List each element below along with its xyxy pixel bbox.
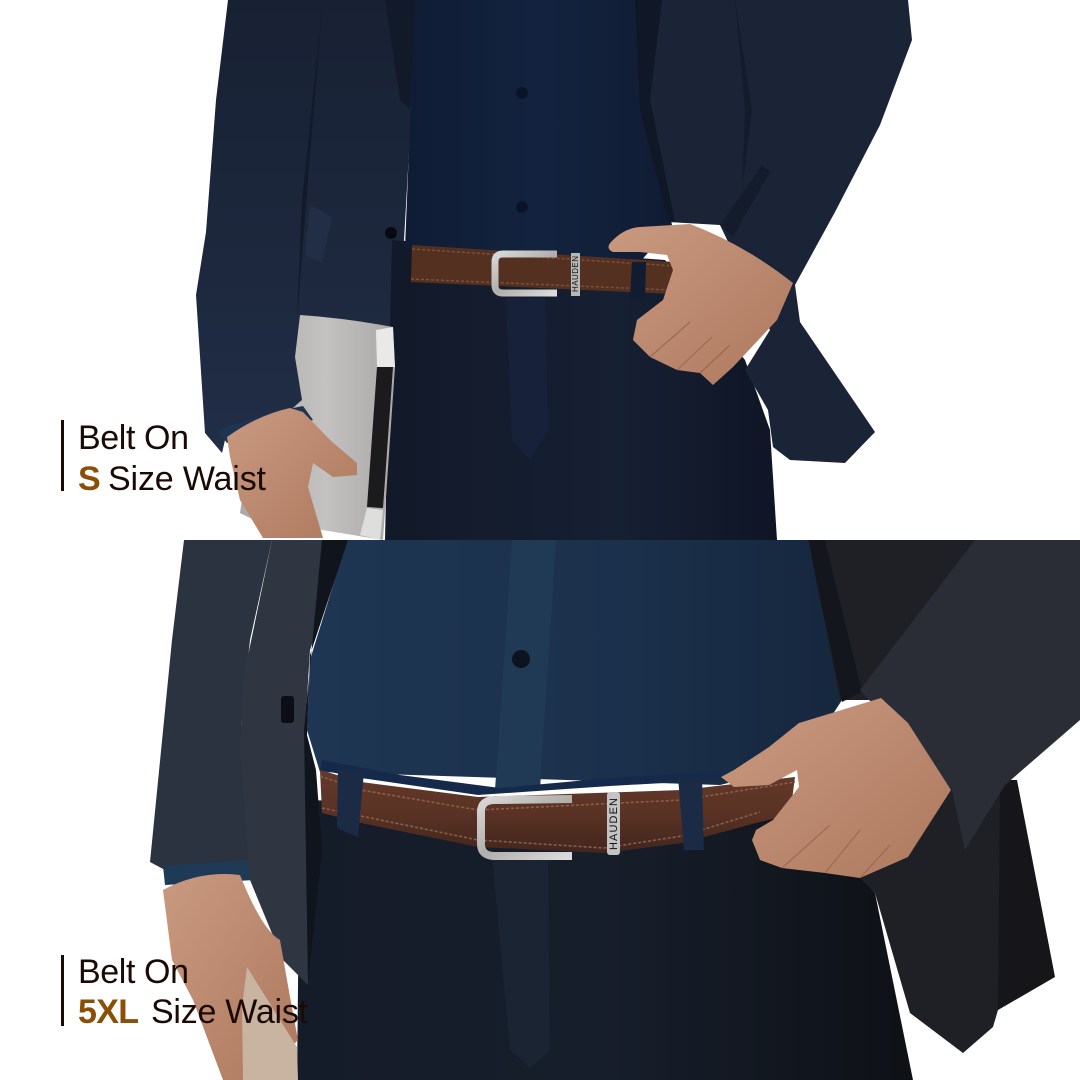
phone: [242, 967, 298, 1080]
label: S size waist: Belt On: [78, 419, 189, 457]
label: 5XL size waist: Size Waist: [151, 993, 309, 1031]
left jacket: [196, 0, 418, 453]
trouser placket: [492, 856, 550, 1068]
shirt placket: [495, 540, 556, 790]
right jacket and sleeve: [635, 0, 912, 463]
trousers: [297, 800, 913, 1080]
label: S size waist: [61, 419, 267, 498]
shirt: [307, 540, 842, 785]
left sleeve: [150, 540, 272, 870]
left jacket front: [240, 540, 348, 985]
buckle: HAUDEN: [608, 798, 620, 850]
shirt: [405, 0, 672, 262]
back jacket tail: [955, 780, 1055, 1010]
label: S size waist: S: [78, 460, 101, 498]
belt: [411, 245, 675, 300]
label: S size waist: Size Waist: [108, 460, 267, 498]
trousers: [385, 240, 777, 540]
label: 5XL size waist: 5XL: [78, 993, 139, 1031]
hand on belt: [608, 224, 793, 385]
hand on belt: [721, 698, 951, 878]
buckle: [495, 253, 580, 296]
buckle: [481, 792, 620, 856]
shirt cuff: [163, 860, 255, 885]
shirt buttons: [516, 87, 528, 213]
tablet: [240, 315, 395, 540]
label: 5XL size waist: Belt On: [78, 953, 189, 991]
hand holding phone: [163, 874, 298, 1080]
label: 5XL size waist: [61, 953, 309, 1031]
belt: [320, 760, 795, 853]
buckle: HAUDEN: [571, 256, 580, 292]
hand holding tablet: [227, 408, 357, 538]
panel: 5XL size waist photo: [150, 540, 1080, 1080]
trouser placket: [506, 298, 548, 460]
panel: S size waist photo: [196, 0, 912, 540]
right jacket: [808, 540, 1080, 1053]
shirt cuff: [217, 406, 313, 443]
